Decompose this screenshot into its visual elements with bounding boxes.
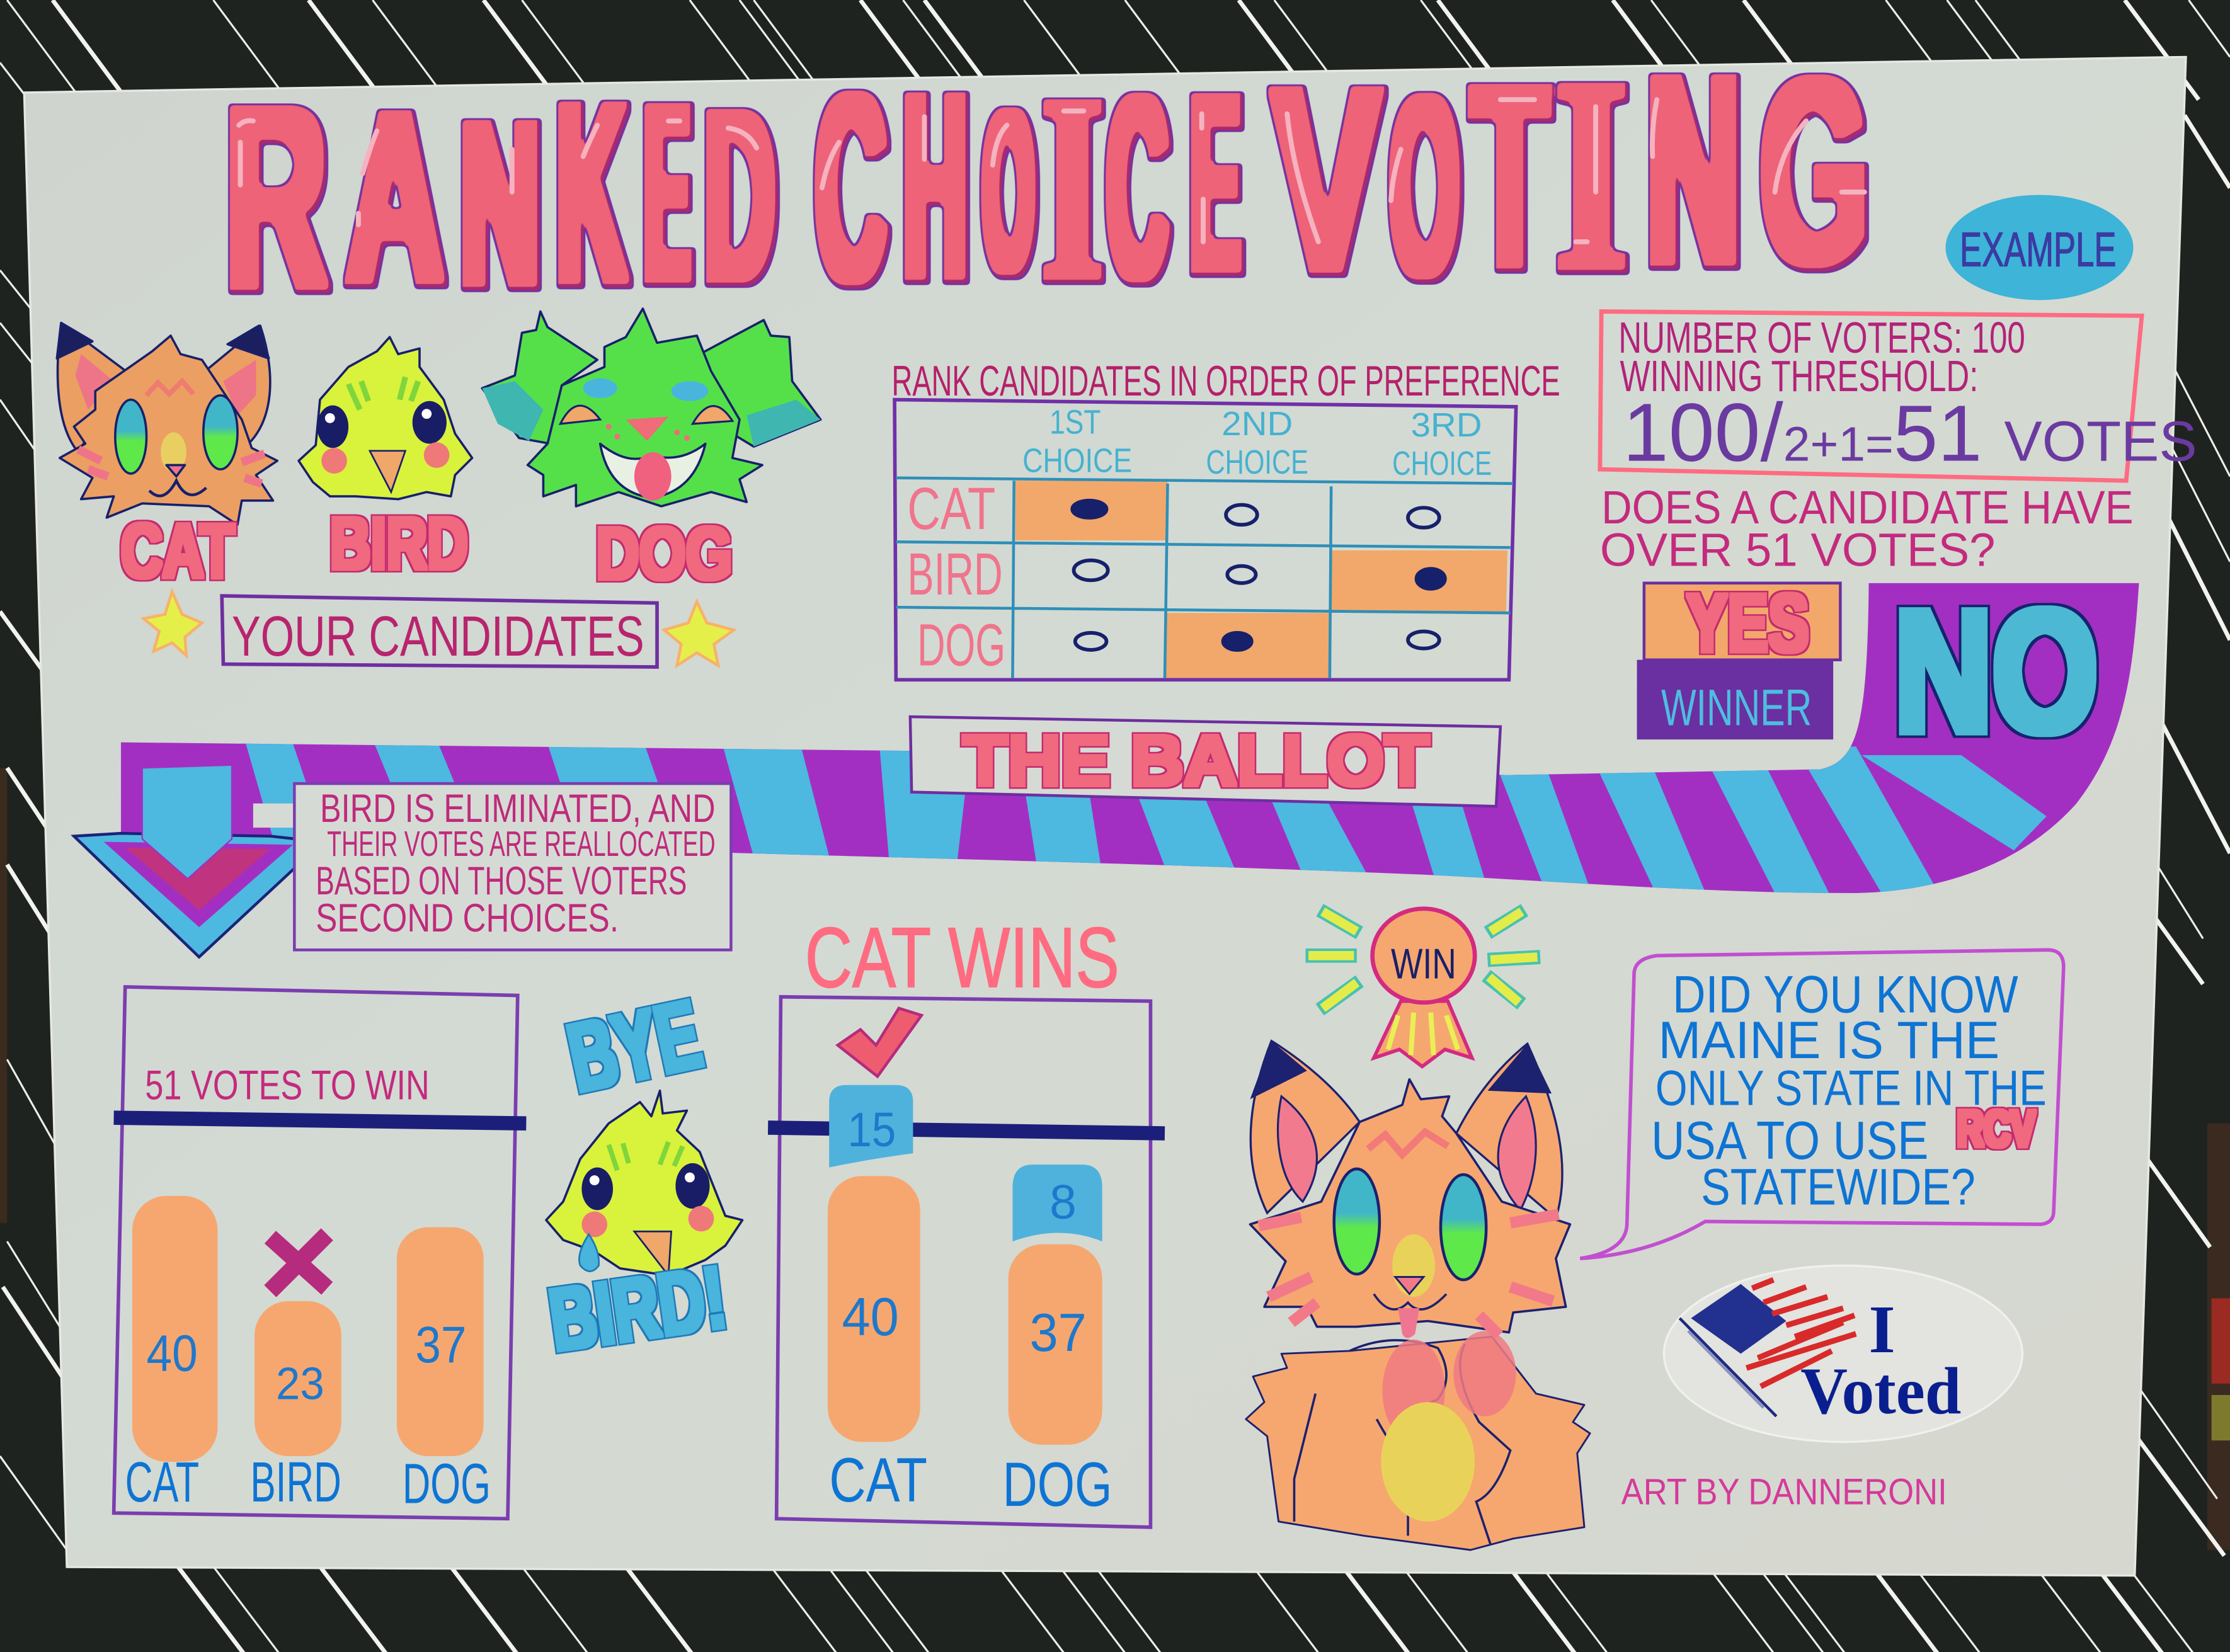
- heading: rank candidates: RANK CANDIDATES IN ORDER OF PREFERENCE: [892, 358, 1560, 405]
- icon: flag: [1679, 1280, 1856, 1416]
- column headings: CHOICE: [1022, 442, 1132, 480]
- title: Ranked Choice Voting: I: [1557, 23, 1628, 329]
- table grid: [895, 400, 1516, 680]
- threshold line: [768, 1127, 1165, 1133]
- callout: speech bubble: STATEWIDE?: [1701, 1158, 1976, 1216]
- label: CAT: CAT: [121, 508, 235, 594]
- threshold label: 51 VOTES TO WIN: [145, 1062, 430, 1108]
- label: DOG: DOG: [596, 512, 733, 595]
- values: 40: [147, 1325, 198, 1382]
- threshold line: [114, 1118, 526, 1124]
- heading: cat wins: CAT WINS: [805, 909, 1119, 1005]
- title: Ranked Choice Voting: O: [984, 65, 1036, 321]
- label: BIRD!: BIRD!: [544, 1247, 732, 1370]
- panel: first round bar chart: [114, 987, 526, 1518]
- head: [1250, 1079, 1570, 1333]
- icon: X: [270, 1234, 327, 1291]
- panel: winning threshold: WINNING THRESHOLD:: [1620, 351, 1978, 401]
- title: Ranked Choice Voting: K: [558, 50, 627, 338]
- icon: crying bird: [546, 1091, 742, 1275]
- bar labels: [829, 1445, 1112, 1520]
- row labels: [907, 476, 1005, 679]
- column headings: 1ST: [1049, 404, 1101, 441]
- title: Ranked Choice Voting: E: [1192, 43, 1242, 326]
- filled cells: [1015, 481, 1507, 678]
- panel: example badge: [1945, 195, 2133, 300]
- bar labels: CAT: [125, 1450, 199, 1514]
- callout: speech bubble: ONLY STATE IN THE: [1655, 1059, 2047, 1115]
- panel: elimination explanation: THEIR VOTES ARE REALLOCATED: [327, 824, 716, 863]
- row labels: CAT: [907, 476, 995, 542]
- panel: bye bird: [544, 979, 742, 1370]
- column headings: CHOICE: [1392, 445, 1492, 482]
- question text: OVER 51 VOTES?: [1600, 524, 1995, 576]
- panel: YES winner: WINNER: [1661, 680, 1812, 737]
- sticker: I Voted: Voted: [1800, 1353, 1961, 1428]
- box: the ballot label: [910, 717, 1501, 806]
- column headings: CHOICE: [1206, 443, 1308, 481]
- question text: [1600, 481, 2133, 576]
- body: [1246, 1336, 1590, 1550]
- panel: elimination explanation: [294, 783, 731, 950]
- bars: [828, 1176, 1102, 1445]
- panel: ribbon flow from no to arrow: [114, 576, 2147, 910]
- ears: [1250, 1041, 1562, 1219]
- callout: speech bubble: DID YOU KNOW: [1672, 965, 2018, 1024]
- icon: star right: [664, 601, 734, 666]
- row labels: DOG: [917, 612, 1005, 679]
- bar labels: [125, 1450, 491, 1515]
- panel: winning threshold: 100/2+1=51 VOTES: [1623, 386, 2197, 479]
- label: BYE: BYE: [559, 979, 710, 1112]
- values: 8: [1049, 1176, 1077, 1229]
- values: [147, 1316, 467, 1410]
- ballot marks: [1072, 501, 1445, 650]
- title: Ranked Choice Voting: G: [1761, 25, 1870, 321]
- title: Ranked Choice Voting: R: [226, 53, 329, 344]
- title: Ranked Choice Voting: D: [706, 60, 777, 334]
- row labels: BIRD: [907, 541, 1003, 608]
- rays: [1306, 910, 1540, 1010]
- credit: ART BY DANNERONI: [1621, 1472, 1947, 1513]
- title: Ranked Choice Voting: N: [460, 74, 542, 336]
- panel: elimination explanation: BIRD IS ELIMINATED, AND: [320, 787, 716, 831]
- title: Ranked Choice Voting: V: [1273, 33, 1383, 328]
- reallocated votes caps: [829, 1085, 1102, 1241]
- icon: win medal: [1306, 909, 1540, 1066]
- title: Ranked Choice Voting: C: [816, 40, 888, 338]
- panel: winning threshold: NUMBER OF VOTERS: 100: [1618, 313, 2025, 362]
- panel: winning threshold: [1600, 312, 2197, 481]
- values: 37: [1030, 1302, 1087, 1363]
- sticker: I Voted: [1664, 1265, 2022, 1442]
- bars: [132, 1196, 484, 1462]
- values: 37: [415, 1316, 467, 1374]
- panel: YES winner: [1637, 576, 1840, 739]
- callout: speech bubble: MAINE IS THE: [1658, 1010, 1999, 1069]
- values: 40: [842, 1287, 899, 1347]
- panel: the ballot table: [892, 358, 1560, 680]
- callout: speech bubble: USA TO USE: [1651, 1110, 1928, 1171]
- illustration: cat winner: [1246, 1041, 1590, 1550]
- bar labels: BIRD: [250, 1450, 341, 1514]
- icon: win medal: WIN: [1391, 940, 1456, 988]
- title: Ranked Choice Voting: C: [1108, 43, 1169, 334]
- title highlights: [239, 100, 1865, 242]
- icon: star left: [144, 591, 202, 656]
- title: Ranked Choice Voting: H: [905, 40, 968, 335]
- panel: final round bar chart: [768, 997, 1165, 1527]
- title: Ranked Choice Voting: N: [1647, 20, 1742, 322]
- big NO: NO: [1894, 575, 2098, 768]
- bar labels: DOG: [403, 1452, 491, 1515]
- title: Ranked Choice Voting: A: [347, 62, 445, 335]
- panel: elimination explanation: BASED ON THOSE VOTERS: [316, 859, 687, 903]
- label: BIRD: BIRD: [330, 502, 468, 584]
- box: your candidates: YOUR CANDIDATES: [232, 605, 644, 668]
- title: Ranked Choice Voting: [226, 20, 1870, 344]
- panel: YES winner: YES: [1687, 576, 1809, 669]
- bar labels: DOG: [1003, 1450, 1112, 1520]
- panel: example badge: EXAMPLE: [1960, 223, 2116, 276]
- icon: cat head: [57, 323, 277, 525]
- callout: speech bubble: [1580, 950, 2064, 1258]
- arrow down: [74, 765, 323, 957]
- panel: elimination explanation: SECOND CHOICES.: [316, 896, 619, 940]
- icon: check mark: [838, 1008, 922, 1076]
- title: Ranked Choice Voting: I: [1044, 41, 1104, 337]
- column headings: 3RD: [1411, 406, 1482, 444]
- values: 23: [276, 1359, 324, 1410]
- sticker: I Voted: I: [1869, 1292, 1896, 1367]
- icon: bird head: [299, 337, 472, 499]
- box: the ballot label: THE BALLOT: [963, 721, 1429, 800]
- values: 15: [848, 1103, 896, 1157]
- title: Ranked Choice Voting: E: [646, 53, 691, 336]
- column headings: 2ND: [1221, 405, 1293, 443]
- column headings: [1022, 404, 1492, 482]
- box: your candidates: [222, 596, 657, 668]
- icon: dog head: [482, 309, 821, 506]
- callout: speech bubble: RCV: [1957, 1100, 2035, 1158]
- panel: candidates: [57, 309, 821, 668]
- title: Ranked Choice Voting: O: [1391, 45, 1461, 331]
- values: [842, 1103, 1087, 1363]
- title: Ranked Choice Voting: T: [1472, 32, 1550, 323]
- bar labels: CAT: [829, 1445, 927, 1515]
- question text: DOES A CANDIDATE HAVE: [1601, 481, 2133, 533]
